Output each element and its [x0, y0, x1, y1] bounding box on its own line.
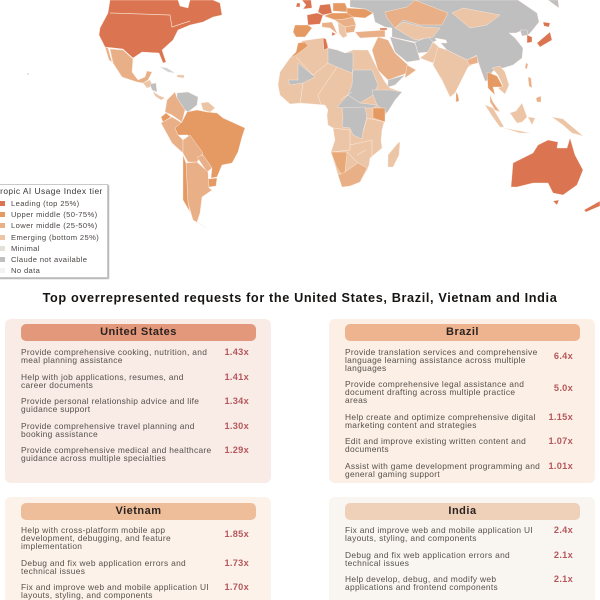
request row: 2.4x [554, 525, 573, 535]
region: central america and caribbean [27, 47, 184, 100]
heading: United States [21, 324, 256, 341]
world map [27, 0, 600, 228]
region: us canada border [110, 13, 190, 27]
heading: United States: United States [100, 326, 177, 338]
request row: technical issues [21, 566, 85, 576]
region: south and east asia [433, 8, 583, 136]
request row: technical issues [345, 558, 409, 568]
request row: language learning assistance across multiple [345, 355, 526, 365]
request row: 1.07x [548, 436, 573, 446]
request row: Assist with game development programming and [345, 460, 540, 470]
request row: general gaming support [345, 468, 440, 478]
request row: Help with cross-platform mobile app [21, 525, 165, 535]
request row: document drafting across multiple practice [345, 387, 515, 397]
request row: 1.70x [224, 582, 249, 592]
request row [345, 412, 573, 430]
request row [21, 420, 249, 438]
panel: Vietnam [5, 497, 271, 600]
request row [21, 396, 249, 414]
request row: 1.43x [224, 347, 249, 357]
panel: Brazil [329, 319, 595, 483]
request row: guidance across multiple specialties [21, 453, 166, 463]
request row: 5.0x [554, 383, 573, 393]
request row: Edit and improve existing written content and [345, 436, 526, 446]
request row [345, 379, 573, 405]
request row: Provide comprehensive medical and healthcare [21, 445, 212, 455]
request row: Fix and improve web and mobile application UI [345, 525, 533, 535]
request row: 1.29x [224, 445, 249, 455]
request row [345, 525, 573, 543]
heading: India: India [448, 505, 477, 517]
request row: Fix and improve web and mobile application UI [21, 582, 209, 592]
request row [21, 582, 249, 600]
legend: lower middle: Lower middle (25-50%) [11, 221, 97, 230]
request row [21, 372, 249, 390]
request row [345, 550, 573, 568]
request row: layouts, styling, and components [345, 533, 477, 543]
request row: booking assistance [21, 428, 98, 438]
legend: no data: No data [11, 266, 40, 275]
panel: India [329, 497, 595, 600]
request row [21, 558, 249, 576]
region: russia china and gray asia [350, 0, 559, 81]
region: middle east and central asia [355, 0, 448, 87]
request row: Help develop, debug, and modify web [345, 574, 496, 584]
request row: 2.1x [554, 574, 573, 584]
request row [345, 347, 573, 373]
request row: 6.4x [554, 351, 573, 361]
region: australia and new zealand [511, 138, 600, 212]
request row: 1.15x [548, 412, 573, 422]
request row [21, 525, 249, 551]
request row: 1.30x [224, 420, 249, 430]
request row: Provide personal relationship advice and life [21, 396, 199, 406]
legend: emerging: Emerging (bottom 25%) [11, 233, 99, 242]
region: africa inner borders [296, 57, 385, 163]
request row: Help create and optimize comprehensive digital [345, 412, 536, 422]
request row: 1.41x [224, 372, 249, 382]
heading: Brazil [345, 324, 580, 341]
heading: Vietnam: Vietnam [115, 505, 162, 517]
request row: applications and frontend components [345, 582, 498, 592]
region: north america leading tier [99, 0, 222, 63]
request row: development, debugging, and feature [21, 533, 171, 543]
legend: leading: Leading (top 25%) [11, 199, 80, 208]
request row: guidance support [21, 404, 90, 414]
request row [21, 445, 249, 463]
request row [345, 460, 573, 478]
request row: layouts, styling, and components [21, 590, 153, 600]
request row: Provide comprehensive cooking, nutrition, and [21, 347, 207, 357]
request row [21, 347, 249, 365]
region: europe [293, 0, 387, 38]
region: africa [278, 38, 402, 187]
request row: languages [345, 363, 387, 373]
request row: meal planning assistance [21, 355, 123, 365]
request row: Provide comprehensive travel planning and [21, 420, 195, 430]
legend: minimal: Minimal [11, 244, 40, 253]
request row: 1.34x [224, 396, 249, 406]
request row [345, 574, 573, 592]
legend: not available: Claude not available [11, 255, 87, 264]
request row: Provide comprehensive legal assistance and [345, 379, 524, 389]
request row: 1.85x [224, 529, 249, 539]
panel: United States [5, 319, 271, 483]
legend: upper middle: Upper middle (50-75%) [11, 210, 97, 219]
heading: Vietnam [21, 503, 256, 520]
heading: India [345, 503, 580, 520]
request row: Debug and fix web application errors and [21, 558, 186, 568]
title: Top overrepresented requests for the United States, Brazil, Vietnam and India [43, 291, 557, 305]
request row: implementation [21, 541, 82, 551]
request row: Help with job applications, resumes, and [21, 372, 184, 382]
request row: 2.1x [554, 550, 573, 560]
heading: Brazil: Brazil [446, 326, 479, 338]
request row: Debug and fix web application errors and [345, 550, 510, 560]
request row: documents [345, 444, 389, 454]
request row: career documents [21, 380, 93, 390]
region: south america [161, 92, 245, 228]
request row: areas [345, 395, 368, 405]
request row [345, 436, 573, 454]
legend [0, 184, 108, 278]
request row: marketing content and strategies [345, 420, 477, 430]
request row: 1.73x [224, 558, 249, 568]
request row: Provide translation services and comprehensive [345, 347, 538, 357]
request row: 1.01x [548, 460, 573, 470]
